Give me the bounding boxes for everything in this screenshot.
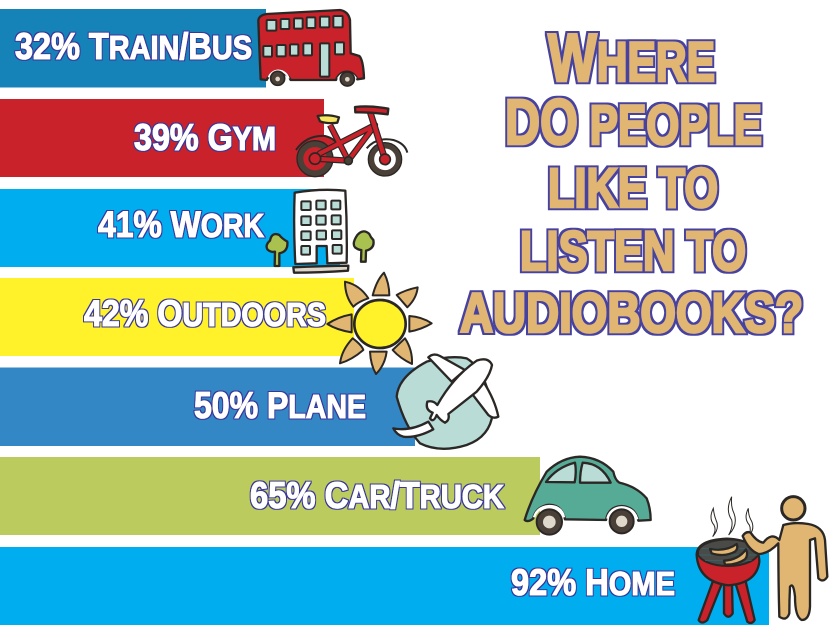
label: 39% gym: 39% GYM (134, 117, 276, 158)
title line: like to: LIKE TO (548, 156, 718, 219)
icon: plane over globe (393, 355, 498, 449)
label: 65% car/truck: 65% CAR/TRUCK (250, 475, 504, 516)
bar: plane (0, 368, 415, 446)
bar: outdoors (0, 278, 354, 356)
label: 32% train/bus: 32% TRAIN/BUS (15, 26, 252, 67)
bar: train/bus (0, 9, 266, 88)
icon: office building with trees (267, 190, 374, 273)
bar: gym (0, 99, 324, 177)
label: 50% plane: 50% PLANE (194, 385, 366, 426)
label: 92% home: 92% HOME (511, 562, 675, 603)
bar: home (0, 547, 769, 625)
bar: work (0, 189, 340, 267)
icon: double-decker bus (258, 10, 364, 86)
icon: person at barbecue grill (697, 497, 827, 623)
title line: listen to: LISTEN TO (520, 219, 746, 282)
bar: car/truck (0, 457, 540, 535)
title line: do people: DO PEOPLE (505, 86, 762, 158)
label: 41% work: 41% WORK (98, 204, 264, 245)
icon: bicycle (296, 106, 407, 177)
title line: Where: WHERE (548, 20, 715, 96)
label: 42% outdoors: 42% OUTDOORS (84, 293, 326, 334)
title (460, 20, 803, 344)
icon: car (525, 457, 651, 535)
icon: sun (327, 273, 432, 374)
